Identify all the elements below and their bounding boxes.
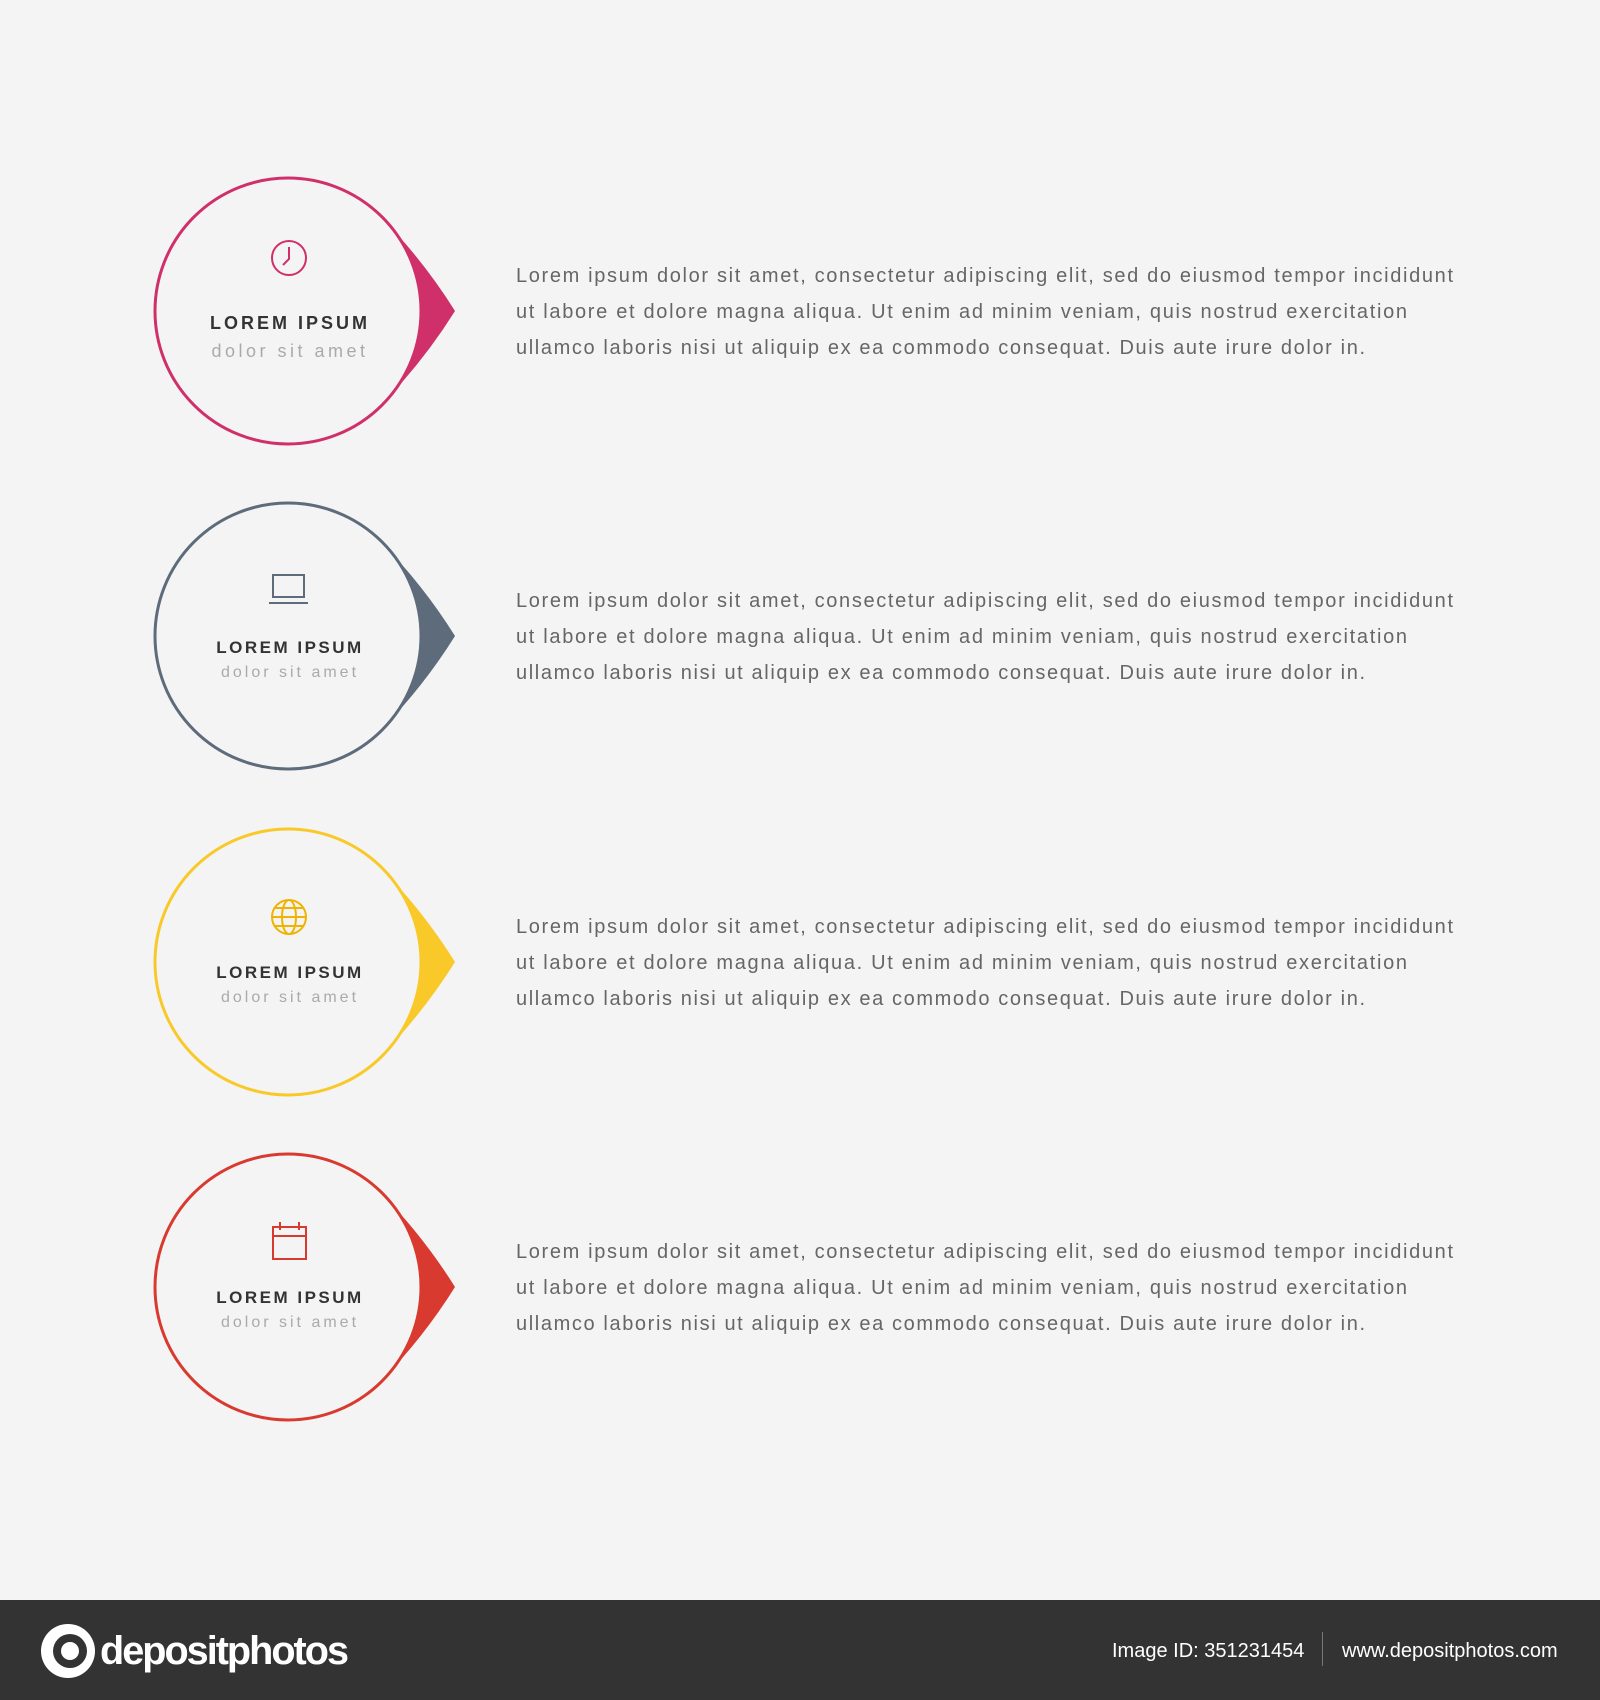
text block 4 (516, 1241, 1453, 1335)
icon: clock (272, 241, 306, 275)
item 4: red marker: dolor sit amet (221, 1314, 359, 1331)
item 2: slate marker (155, 503, 455, 769)
item 2: slate marker: dolor sit amet (221, 664, 359, 681)
text block 3 (516, 916, 1453, 1010)
footer image id: Image ID: 351231454 (1112, 1640, 1304, 1662)
heading 4: LOREM IPSUM (216, 1288, 364, 1307)
heading 2: LOREM IPSUM (216, 638, 364, 657)
heading 1: LOREM IPSUM (210, 313, 370, 333)
text block 2: ut labore et dolore magna aliqua. Ut enim ad minim veniam, quis nostrud exercitation (516, 626, 1407, 648)
text block 1: ut labore et dolore magna aliqua. Ut enim ad minim veniam, quis nostrud exercitation (516, 301, 1407, 323)
footer logo: depositphotos (100, 1629, 348, 1673)
text block 1: ullamco laboris nisi ut aliquip ex ea commodo consequat. Duis aute irure dolor in. (516, 337, 1365, 359)
item 1: pink marker (155, 178, 455, 444)
text block 4: ut labore et dolore magna aliqua. Ut enim ad minim veniam, quis nostrud exercitation (516, 1277, 1407, 1299)
item 3: yellow marker (155, 829, 455, 1095)
text block 3: Lorem ipsum dolor sit amet, consectetur adipiscing elit, sed do eiusmod tempor incididunt (516, 916, 1453, 938)
item 1: pink marker: dolor sit amet (211, 341, 369, 361)
text block 2: Lorem ipsum dolor sit amet, consectetur adipiscing elit, sed do eiusmod tempor incididunt (516, 590, 1453, 612)
footer logo (41, 1624, 348, 1678)
text block 1 (516, 265, 1453, 359)
item 3: yellow marker: dolor sit amet (221, 989, 359, 1006)
text block 1: Lorem ipsum dolor sit amet, consectetur adipiscing elit, sed do eiusmod tempor incididunt (516, 265, 1453, 287)
text block 4: Lorem ipsum dolor sit amet, consectetur adipiscing elit, sed do eiusmod tempor incididunt (516, 1241, 1453, 1263)
text block 4: ullamco laboris nisi ut aliquip ex ea commodo consequat. Duis aute irure dolor in. (516, 1313, 1365, 1335)
text block 3: ullamco laboris nisi ut aliquip ex ea commodo consequat. Duis aute irure dolor in. (516, 988, 1365, 1010)
icon: calendar (273, 1222, 306, 1259)
text block 2 (516, 590, 1453, 684)
footer url: www.depositphotos.com (1341, 1640, 1558, 1662)
icon: globe (272, 900, 306, 934)
footer bar (0, 1600, 1600, 1700)
icon: laptop (269, 575, 308, 603)
item 4: red marker (155, 1154, 455, 1420)
text block 3: ut labore et dolore magna aliqua. Ut enim ad minim veniam, quis nostrud exercitation (516, 952, 1407, 974)
text block 2: ullamco laboris nisi ut aliquip ex ea commodo consequat. Duis aute irure dolor in. (516, 662, 1365, 684)
heading 3: LOREM IPSUM (216, 963, 364, 982)
